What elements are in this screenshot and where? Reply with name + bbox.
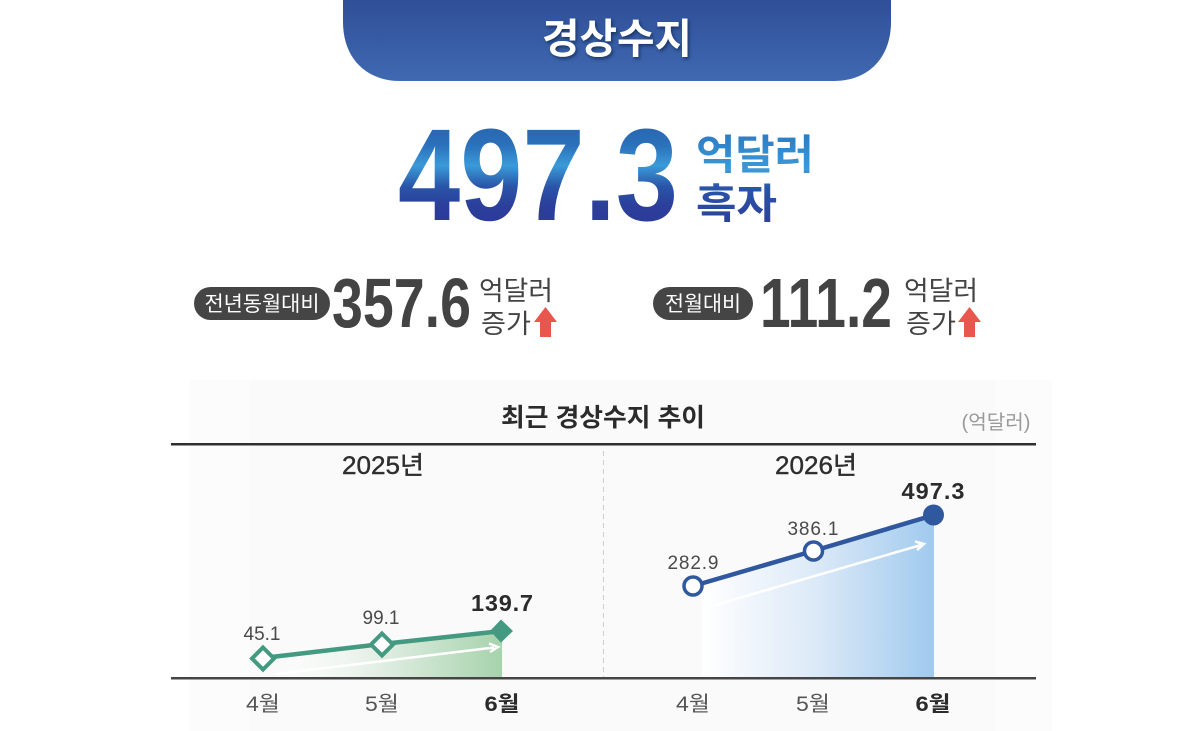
chart title: 최근 경상수지 추이 bbox=[501, 404, 705, 432]
marker June bbox=[923, 504, 944, 526]
unit: 억달러 bbox=[479, 276, 553, 306]
comparison: month on month bbox=[653, 264, 981, 342]
line chart: 2025 bbox=[244, 590, 533, 677]
x axis labels 2025: 6월 bbox=[484, 693, 520, 716]
year label 2025: 2025년 bbox=[342, 452, 424, 480]
trend arrow bbox=[276, 644, 498, 674]
pill label: 전월대비 bbox=[665, 293, 741, 316]
axis rules bbox=[171, 443, 1036, 446]
pill label bbox=[194, 287, 330, 320]
unit: 억달러: 억달러 bbox=[696, 132, 814, 178]
value 282.9: 282.9 bbox=[668, 553, 718, 574]
change label: 증가 bbox=[906, 309, 956, 339]
marker April bbox=[684, 577, 702, 595]
unit: 억달러 bbox=[904, 276, 978, 306]
value 497.3: 497.3 bbox=[902, 478, 964, 504]
pill label bbox=[653, 287, 753, 320]
line chart: 2026 bbox=[668, 478, 964, 677]
label: 흑자: 흑자 bbox=[696, 181, 777, 227]
marker May bbox=[804, 542, 822, 560]
x axis labels 2025: 5월 bbox=[365, 693, 399, 716]
area fill bbox=[263, 631, 502, 677]
header banner bbox=[343, 0, 891, 81]
marker June bbox=[490, 620, 513, 642]
x axis labels 2026: 4월 bbox=[676, 693, 710, 716]
year label 2026: 2026년 bbox=[775, 452, 857, 480]
change label: 증가 bbox=[481, 309, 531, 339]
comparison: year on year bbox=[194, 264, 557, 342]
big number: 497.3 bbox=[398, 101, 678, 248]
trend arrow bbox=[708, 542, 924, 607]
line bbox=[693, 515, 934, 586]
icon: up arrow bbox=[958, 307, 981, 337]
pill label: 전년동월대비 bbox=[204, 293, 320, 316]
x axis labels 2026: 6월 bbox=[916, 693, 950, 716]
value 45.1: 45.1 bbox=[244, 624, 280, 645]
value: 111.2 bbox=[760, 264, 892, 342]
x axis labels 2026 bbox=[676, 693, 950, 716]
headline value bbox=[398, 101, 814, 248]
marker April bbox=[252, 648, 274, 670]
value: 357.6 bbox=[332, 264, 471, 342]
area fill bbox=[702, 515, 934, 677]
x axis labels 2025 bbox=[246, 693, 520, 716]
marker May bbox=[371, 634, 393, 656]
line bbox=[263, 631, 502, 658]
x axis labels 2025: 4월 bbox=[246, 693, 280, 716]
x axis labels 2026: 5월 bbox=[796, 693, 830, 716]
icon: up arrow bbox=[534, 307, 557, 337]
value 99.1: 99.1 bbox=[363, 608, 399, 629]
value 139.7: 139.7 bbox=[471, 590, 533, 616]
chart panel background bbox=[190, 380, 1052, 731]
value 386.1: 386.1 bbox=[788, 519, 838, 540]
title: 경상수지 bbox=[542, 16, 692, 62]
unit note: (억달러) bbox=[962, 411, 1030, 434]
